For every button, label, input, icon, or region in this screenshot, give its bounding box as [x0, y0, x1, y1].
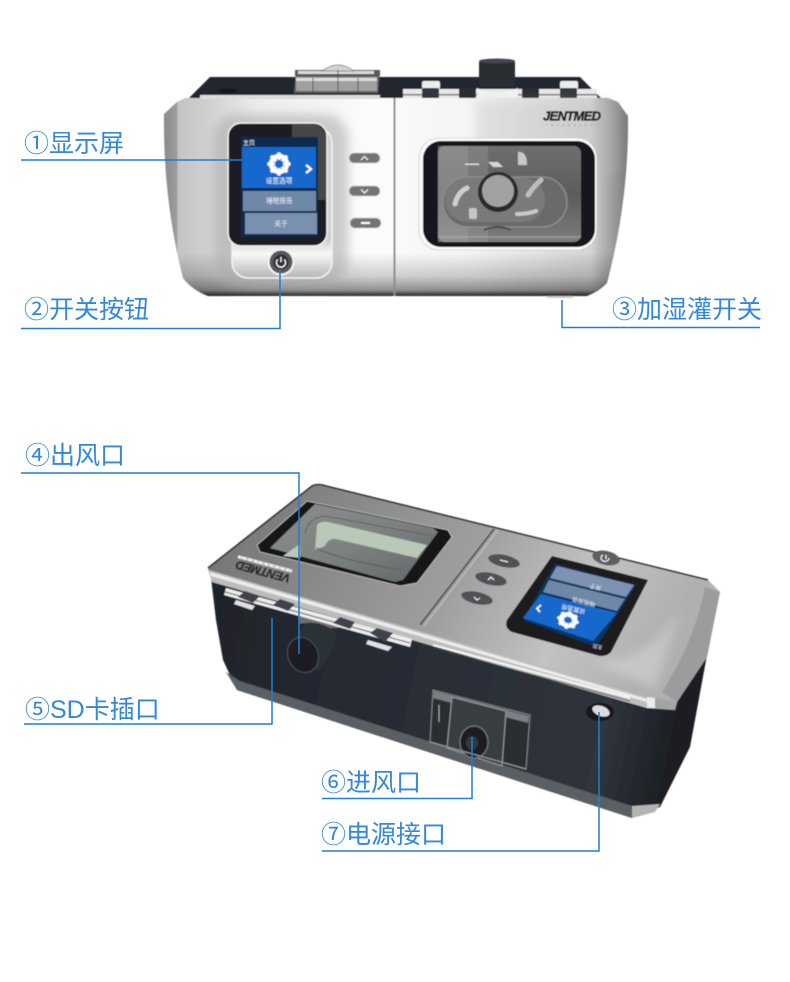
- lip highlight: [209, 570, 647, 708]
- display screen: [506, 556, 648, 656]
- rear view device: [208, 484, 720, 818]
- label 1: display: ①显示屏: [24, 130, 124, 158]
- sleep report panel: [243, 191, 316, 211]
- air outlet knob: [474, 58, 520, 99]
- settings panel: [242, 147, 316, 188]
- control pad surround: [232, 127, 332, 278]
- brand logo: JENTMED: [543, 108, 602, 124]
- brand logo: TECHNOLOGY: [546, 123, 598, 127]
- label 5: SD card slot: ⑤SD卡插口: [25, 696, 160, 724]
- brand logo inverted: TECHNOLOGY: [240, 555, 292, 573]
- sleep report panel: [543, 580, 625, 611]
- air inlet filter bracket: [430, 690, 530, 769]
- label 6: air inlet: [321, 737, 472, 798]
- label 4: air outlet: ④出风口: [25, 442, 125, 470]
- screen bezel: [228, 123, 327, 246]
- label 5: SD card slot: [24, 618, 272, 724]
- screen title: 主页: [243, 139, 255, 147]
- power button: [268, 248, 294, 276]
- display screen: 睡眠报告: [266, 196, 293, 205]
- dark side body: [211, 578, 707, 818]
- label 3: humidifier switch: ③加湿灌开关: [612, 296, 762, 324]
- power connector: [586, 703, 614, 721]
- display screen: 睡眠报告: [571, 595, 596, 609]
- humidifier switch: [547, 296, 573, 298]
- label 3: humidifier switch: [562, 296, 762, 328]
- front view device: [164, 58, 628, 298]
- main silver body: [164, 98, 628, 296]
- panel divider: [420, 529, 494, 625]
- settings panel: [523, 594, 617, 641]
- about panel: [245, 213, 317, 234]
- icon: gear: [268, 152, 290, 176]
- display screen: 关于: [589, 582, 602, 592]
- control buttons: [460, 552, 521, 607]
- display screen: 设置选项: [561, 602, 586, 616]
- water tank window: [257, 501, 452, 586]
- label 2: power button: [21, 270, 280, 328]
- air outlet tube: [282, 615, 340, 678]
- display screen: 关于: [274, 219, 288, 228]
- label 7: power socket: ⑦电源接口: [321, 821, 446, 849]
- label 7: power socket: [321, 712, 599, 851]
- label 4: air outlet: [21, 442, 299, 654]
- silver top surface: [208, 484, 720, 710]
- chevron: [306, 165, 311, 173]
- humidifier window: [419, 138, 597, 250]
- label 6: air inlet: ⑥进风口: [321, 769, 421, 797]
- display screen: 设置选项: [266, 176, 293, 185]
- slit line: [433, 645, 630, 698]
- rear dark housing: [188, 77, 602, 99]
- power button: [591, 548, 621, 568]
- display screen: 主页: [592, 642, 603, 651]
- brand logo inverted: VENTMED: [234, 558, 292, 586]
- recess halo: [214, 114, 348, 286]
- rear clips: [403, 81, 597, 99]
- front clips: [224, 588, 412, 651]
- display screen: [228, 123, 327, 246]
- label 2: power button: ②开关按钮: [24, 296, 149, 324]
- about panel: [550, 566, 634, 597]
- end facet: [662, 587, 720, 702]
- top hinge: [219, 65, 380, 94]
- icon: gear: [555, 609, 581, 631]
- side buttons: [349, 153, 381, 228]
